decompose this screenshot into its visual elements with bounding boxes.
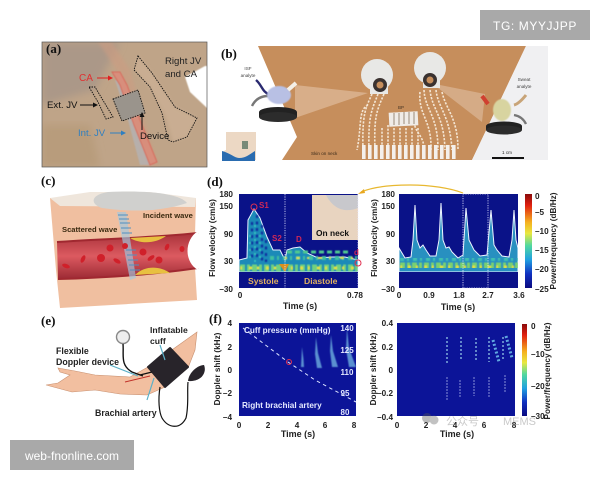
watermark: MEMS bbox=[422, 413, 536, 428]
chart: Doppler shift with cuff pressure: Cuff pressure (mmHg) bbox=[244, 326, 331, 335]
chart: flow velocity single beat: D bbox=[296, 235, 302, 244]
chart: flow velocity multi-beat: 90 bbox=[386, 230, 395, 239]
chart: flow velocity multi-beat: 30 bbox=[386, 257, 395, 266]
chart: Doppler shift with cuff pressure: 140 bbox=[340, 324, 354, 333]
panel e: arm with cuff bbox=[41, 313, 205, 426]
colorbar d: Power/frequency (dB/Hz) bbox=[549, 192, 558, 289]
panel a labels: Int. JV bbox=[78, 128, 106, 139]
chart: flow velocity multi-beat: 1.8 bbox=[453, 291, 465, 300]
chart: Doppler shift with cuff pressure: 2 bbox=[266, 421, 271, 430]
colorbar f: Power/frequency (dB/Hz) bbox=[543, 322, 552, 419]
chart: Doppler shift narrow range: 4 bbox=[453, 421, 458, 430]
panel e: arm with cuff: cuff bbox=[150, 336, 166, 346]
chart: Doppler shift with cuff pressure: 0 bbox=[237, 421, 242, 430]
chart: flow velocity single beat: Diastole bbox=[304, 276, 338, 286]
chart: flow velocity single beat: Time (s) bbox=[283, 301, 317, 311]
sensor pads bbox=[361, 52, 446, 94]
chart: Doppler shift with cuff pressure: Time (s) bbox=[281, 429, 315, 439]
panel a labels: Ext. JV bbox=[47, 100, 78, 111]
watermark: MEMS: MEMS bbox=[503, 416, 536, 428]
chart: Doppler shift with cuff pressure bbox=[213, 319, 357, 439]
panel a labels: CA bbox=[79, 73, 93, 84]
chart: flow velocity single beat: S1 bbox=[259, 201, 269, 210]
device bbox=[113, 90, 145, 121]
chart: flow velocity multi-beat: 3.6 bbox=[513, 291, 525, 300]
chart: flow velocity single beat bbox=[208, 190, 363, 311]
chart: flow velocity single beat: d bbox=[354, 248, 359, 257]
panel f label: (f) bbox=[209, 311, 222, 326]
axis labels: 180 bbox=[219, 190, 233, 199]
chart: Doppler shift with cuff pressure: 4 bbox=[227, 319, 232, 328]
panel d label: (d) bbox=[207, 174, 223, 189]
arrow: zoom link between charts bbox=[358, 185, 463, 194]
chart: Doppler shift narrow range: 0 bbox=[388, 366, 393, 375]
chart: flow velocity multi-beat: Time (s) bbox=[441, 302, 475, 312]
chart: flow velocity single beat: Flow velocity (cm/s) bbox=[208, 199, 217, 277]
chart: Doppler shift with cuff pressure: 8 bbox=[352, 421, 357, 430]
axis labels: 150 bbox=[219, 202, 233, 211]
dashed region: external JV bbox=[89, 87, 113, 119]
chart: flow velocity multi-beat: Flow velocity (cm/s) bbox=[370, 199, 379, 277]
panel c: blood vessel cross-section: (c) bbox=[41, 173, 55, 188]
chart: flow velocity multi-beat: 150 bbox=[381, 202, 395, 211]
colorbar f: –10 bbox=[531, 350, 545, 359]
colorbar d: –10 bbox=[535, 227, 549, 236]
axis labels: 90 bbox=[224, 230, 233, 239]
chart: Doppler shift narrow range: –0.2 bbox=[377, 389, 393, 398]
chart: Doppler shift narrow range: 0.2 bbox=[382, 343, 393, 352]
chart: flow velocity single beat: 0 bbox=[238, 291, 243, 300]
serpentine interconnects bbox=[357, 90, 458, 150]
red blood cells bbox=[62, 243, 184, 269]
scale bar bbox=[492, 150, 524, 159]
panel e: arm with cuff: Doppler device bbox=[56, 357, 119, 367]
chart: flow velocity multi-beat: 180 bbox=[381, 190, 395, 199]
colorbar f bbox=[522, 322, 552, 421]
gauge bbox=[116, 330, 130, 344]
labels: Flexible bbox=[56, 346, 89, 356]
panel b: flexible device on skin: Skin on neck bbox=[311, 151, 338, 156]
colorbar f: 0 bbox=[531, 322, 536, 331]
sweat analyte diagram: Sweat bbox=[518, 77, 531, 82]
panel a labels: and CA bbox=[165, 69, 198, 80]
ISF analyte diagram bbox=[241, 66, 297, 122]
chart: Doppler shift with cuff pressure: 6 bbox=[323, 421, 328, 430]
pointer lines bbox=[110, 345, 165, 400]
panel b: flexible device on skin: (b) bbox=[221, 46, 237, 61]
colorbar d: –25 bbox=[535, 285, 549, 294]
chart: Doppler shift narrow range: –0.4 bbox=[377, 413, 393, 422]
BP sensor bbox=[389, 105, 418, 127]
chart: Doppler shift narrow range bbox=[369, 319, 517, 439]
colorbar d: –20 bbox=[535, 265, 549, 274]
watermark: TG: TG: MYYJJPP bbox=[493, 19, 577, 33]
panel c: blood vessel cross-section bbox=[41, 173, 198, 308]
chart: Doppler shift narrow range: 6 bbox=[482, 421, 487, 430]
tube and bulb bbox=[159, 382, 188, 426]
chart: Doppler shift narrow range: 2 bbox=[424, 421, 429, 430]
watermark: web-fnonline: web-fnonline.com bbox=[24, 449, 119, 463]
colorbar d: –5 bbox=[535, 208, 545, 217]
axis labels: –30 bbox=[219, 285, 233, 294]
arm bbox=[46, 332, 197, 395]
chart: Doppler shift with cuff pressure: 4 bbox=[295, 421, 300, 430]
panel e: arm with cuff: (e) bbox=[41, 313, 55, 328]
colorbar d: –15 bbox=[535, 246, 549, 255]
watermark: TG bbox=[480, 10, 590, 40]
chart: Doppler shift with cuff pressure: 80 bbox=[341, 408, 350, 417]
colorbar f: –30 bbox=[531, 412, 545, 421]
connector pads bbox=[362, 145, 456, 159]
chart: Doppler shift narrow range: Doppler shift (kHz) bbox=[369, 332, 378, 405]
chart: flow velocity single beat: 0.78 bbox=[347, 291, 363, 300]
panel a: neck photo bbox=[42, 41, 209, 167]
cuff bbox=[148, 348, 188, 387]
watermark: web-fnonline bbox=[10, 440, 134, 470]
chart: Doppler shift with cuff pressure: 0 bbox=[227, 366, 232, 375]
panel a labels: Device bbox=[140, 131, 169, 142]
panel e: arm with cuff: Brachial artery bbox=[95, 408, 157, 418]
panel a labels: (a) bbox=[46, 41, 61, 56]
chart: flow velocity single beat: On neck bbox=[316, 228, 349, 238]
colorbar d: 0 bbox=[535, 192, 540, 201]
chart: Doppler shift with cuff pressure: –4 bbox=[223, 413, 232, 422]
chart: flow velocity multi-beat: 0.9 bbox=[423, 291, 435, 300]
plaques bbox=[130, 236, 166, 242]
watermark: MEMS: 公众号 · bbox=[446, 415, 486, 428]
panel a labels bbox=[46, 41, 202, 142]
chart: Doppler shift narrow range: 8 bbox=[512, 421, 517, 430]
chart: flow velocity single beat: S2 bbox=[272, 234, 282, 243]
chart: flow velocity multi-beat bbox=[370, 190, 525, 312]
BP sensor: BP bbox=[398, 105, 404, 110]
chart: Doppler shift with cuff pressure: 2 bbox=[227, 343, 232, 352]
ISF analyte diagram: ISF bbox=[244, 66, 252, 71]
axis labels bbox=[219, 190, 233, 294]
chart: Doppler shift with cuff pressure: Right brachial artery bbox=[242, 401, 322, 410]
colorbar d bbox=[525, 192, 558, 294]
chart: Doppler shift with cuff pressure: 95 bbox=[341, 389, 350, 398]
sweat analyte diagram: analyte bbox=[517, 84, 532, 89]
chart: Doppler shift with cuff pressure: 110 bbox=[341, 368, 354, 377]
panel c: blood vessel cross-section: Scattered wave bbox=[62, 225, 117, 234]
chart: Doppler shift with cuff pressure: 125 bbox=[340, 346, 354, 355]
chart: flow velocity multi-beat: –30 bbox=[381, 285, 395, 294]
chart: Doppler shift with cuff pressure: Doppler shift (kHz) bbox=[213, 332, 222, 405]
chart: flow velocity multi-beat: 2.7 bbox=[482, 291, 494, 300]
colorbar f: –20 bbox=[531, 382, 545, 391]
chart: flow velocity multi-beat: 0 bbox=[397, 291, 402, 300]
scale bar: 1 cm bbox=[502, 150, 512, 155]
ultrasound beam bbox=[117, 212, 136, 280]
chart: flow velocity single beat: Systole bbox=[248, 276, 279, 286]
panel c labels: Incident wave bbox=[143, 211, 193, 220]
chart: Doppler shift narrow range: 0.4 bbox=[382, 319, 393, 328]
ISF analyte diagram: analyte bbox=[241, 73, 256, 78]
panel e: arm with cuff: Inflatable bbox=[150, 325, 188, 335]
chart: Doppler shift with cuff pressure: –2 bbox=[223, 389, 232, 398]
vessel lumen bbox=[57, 233, 198, 279]
chart: Doppler shift narrow range: 0 bbox=[395, 421, 400, 430]
panel a labels: Right JV bbox=[165, 56, 202, 67]
dashed region: right JV and CA bbox=[134, 56, 197, 142]
panel b: flexible device on skin bbox=[215, 46, 548, 161]
neck inset bbox=[222, 132, 256, 161]
chart: Doppler shift narrow range: Time (s) bbox=[440, 429, 474, 439]
sweat analyte diagram bbox=[482, 77, 532, 134]
axis labels: 30 bbox=[224, 257, 233, 266]
